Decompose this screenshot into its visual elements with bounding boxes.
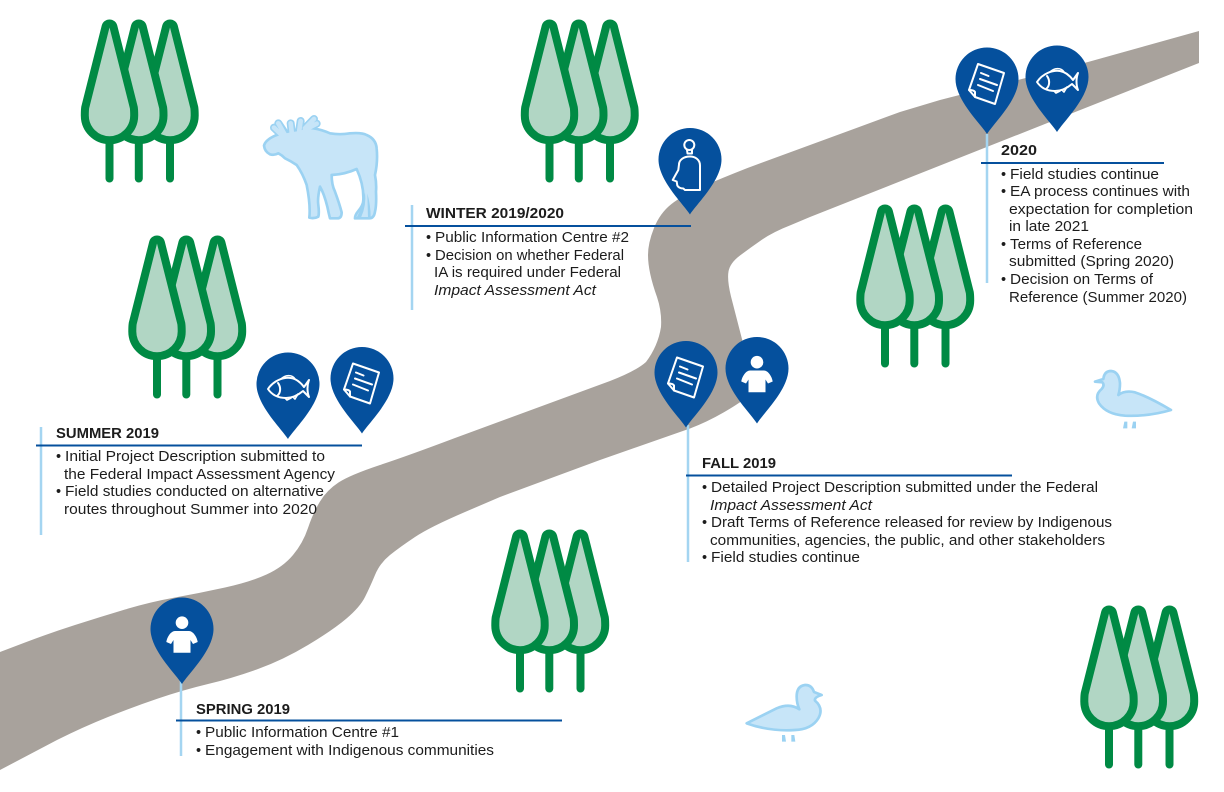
heading: Winter 2019/2020: WINTER 2019/2020 (426, 206, 564, 222)
list: Summer 2019: • (56, 449, 61, 465)
pin: summer document (330, 347, 394, 434)
list: 2020: Decision on Terms of (1010, 272, 1154, 288)
list: Summer 2019: Initial Project Description submitted to (65, 449, 325, 465)
panel: Fall 2019 (654, 337, 1112, 566)
pin: fall document (654, 341, 718, 428)
list: Winter 2019/2020: • (426, 248, 431, 264)
list: 2020: EA process continues with (1010, 184, 1190, 200)
list: Fall 2019: communities, agencies, the public, and other stakeholders (710, 533, 1105, 549)
list: Winter 2019/2020: • (426, 230, 431, 246)
list: Fall 2019: Field studies continue (711, 550, 860, 566)
pin: 2020 fish (1026, 46, 1088, 132)
pin: winter head with lightbulb (658, 128, 722, 214)
list: Winter 2019/2020: Decision on whether Federal (435, 248, 624, 264)
list: Spring 2019: • (196, 743, 201, 759)
tree cluster: bottom right (1084, 609, 1194, 764)
list: Summer 2019 (56, 449, 336, 518)
icon: duck right (1095, 371, 1171, 428)
list: Fall 2019 (702, 480, 1112, 566)
heading: Summer 2019: SUMMER 2019 (56, 426, 159, 442)
pin: fall person (726, 337, 788, 424)
heading: Fall 2019: FALL 2019 (702, 456, 776, 472)
list: Fall 2019: • (702, 515, 707, 531)
list: 2020: • (1001, 272, 1006, 288)
pin: 2020 document (956, 48, 1018, 134)
list: 2020: in late 2021 (1009, 219, 1089, 235)
list: Winter 2019/2020: Impact Assessment Act (434, 283, 597, 299)
list: Spring 2019 (196, 725, 494, 759)
list: Fall 2019: • (702, 550, 707, 566)
list: Summer 2019: the Federal Impact Assessment Agency (64, 467, 336, 483)
list: Winter 2019/2020: Public Information Centre #2 (435, 230, 629, 246)
tree cluster: top centre (525, 23, 635, 179)
list: Fall 2019: Impact Assessment Act (710, 498, 873, 514)
panel: Summer 2019 (36, 347, 394, 535)
panel: 2020 (956, 46, 1193, 306)
icon: duck bottom (747, 685, 822, 742)
panel: Winter 2019/2020 (405, 128, 722, 310)
list: Summer 2019: • (56, 484, 61, 500)
panel: Spring 2019 (150, 598, 562, 759)
list: Spring 2019: Public Information Centre #1 (205, 725, 399, 741)
tree cluster: bottom centre (495, 533, 605, 688)
list: 2020: Field studies continue (1010, 167, 1159, 183)
list: 2020: • (1001, 184, 1006, 200)
list: 2020: • (1001, 167, 1006, 183)
list: Fall 2019: Draft Terms of Reference released for review by Indigenous (711, 515, 1112, 531)
heading: Spring 2019: SPRING 2019 (196, 702, 290, 718)
list: 2020 (1001, 167, 1193, 306)
tree cluster: top left (85, 23, 195, 179)
list: Summer 2019: routes throughout Summer into 2020 (64, 502, 317, 518)
list: Fall 2019: Detailed Project Description submitted under the Federal (711, 480, 1098, 496)
pin: summer fish (256, 352, 320, 439)
heading: 2020: 2020 (1001, 143, 1037, 159)
list: Spring 2019: Engagement with Indigenous communities (205, 743, 494, 759)
icon: moose (264, 119, 377, 218)
list: Spring 2019: • (196, 725, 201, 741)
list: 2020: • (1001, 237, 1006, 253)
list: Winter 2019/2020: IA is required under Federal (434, 265, 621, 281)
list: 2020: Reference (Summer 2020) (1009, 290, 1187, 306)
list: 2020: submitted (Spring 2020) (1009, 254, 1174, 270)
tree cluster: mid left (132, 239, 242, 394)
list: 2020: expectation for completion (1009, 202, 1193, 218)
list: 2020: Terms of Reference (1010, 237, 1142, 253)
list: Fall 2019: • (702, 480, 707, 496)
list: Summer 2019: Field studies conducted on alternative (65, 484, 324, 500)
list: Winter 2019/2020 (426, 230, 629, 299)
pin: spring person (150, 598, 214, 684)
tree cluster: right (860, 208, 970, 364)
